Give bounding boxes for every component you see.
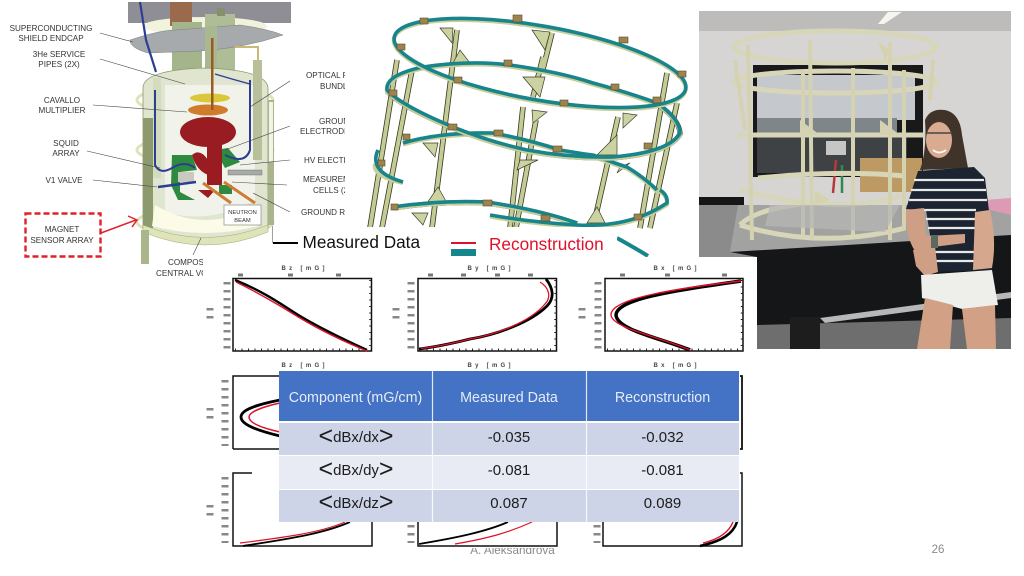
icon: green central columns bbox=[170, 2, 235, 84]
footer: slide number: 26 bbox=[932, 544, 944, 556]
right callout labels: BUNDLE bbox=[320, 82, 353, 91]
icon: yellow and orange discs bbox=[188, 38, 230, 116]
table row: dBx/dx: -0.035 bbox=[488, 429, 530, 446]
gussets bbox=[412, 28, 637, 225]
callout: magnet sensor array: MAGNET bbox=[45, 225, 79, 234]
table header: Component (mG/cm) bbox=[289, 390, 422, 406]
chart: Bx middle row: Bx [mG] bbox=[654, 363, 696, 369]
table row: dBx/dy: -0.081 bbox=[488, 462, 530, 479]
panel: lab photo bbox=[699, 11, 1011, 349]
label: neutron beam: NEUTRON bbox=[228, 210, 257, 216]
table row: dBx/dy: > bbox=[379, 455, 394, 483]
right callout labels: COMPOSITE bbox=[168, 258, 217, 267]
icon: green electrode blocks bbox=[171, 148, 240, 200]
footer: author: A. Aleksandrova bbox=[470, 544, 555, 557]
sensor blocks bbox=[378, 15, 686, 221]
table header: Reconstruction bbox=[615, 390, 710, 406]
chart: Bx top row: Bx [mG] bbox=[654, 266, 696, 272]
table row: dBx/dy: -0.081 bbox=[641, 462, 684, 479]
table row: dBx/dx: dBx/dx bbox=[333, 429, 379, 446]
left callout labels: PIPES (2X) bbox=[38, 60, 80, 69]
chart: Bx middle row bbox=[654, 363, 742, 449]
arrow: neutron beam bbox=[203, 182, 255, 203]
right callout labels: GROUND RINGS bbox=[301, 208, 365, 217]
right callout labels: OPTICAL FIBER bbox=[306, 71, 367, 80]
table row: dBx/dy: < bbox=[318, 455, 333, 483]
table row: dBx/dz: > bbox=[379, 488, 394, 516]
table row: dBx/dy bbox=[279, 455, 739, 489]
table row: dBx/dx: < bbox=[318, 422, 333, 450]
right callout labels: CENTRAL VOLUME bbox=[156, 269, 231, 278]
left callout labels bbox=[10, 24, 92, 185]
callout: magnet sensor array: SENSOR ARRAY bbox=[30, 236, 94, 245]
chart: By top row bbox=[396, 266, 556, 351]
chart: By top row: By [mG] bbox=[468, 266, 510, 272]
right callout labels: GROUND bbox=[319, 117, 355, 126]
chart: By bottom row bbox=[411, 522, 557, 546]
table row: dBx/dx bbox=[279, 422, 739, 455]
chart: By middle row: By [mG] bbox=[468, 363, 510, 369]
photo: woman bbox=[906, 110, 998, 349]
chart: Bx bottom row bbox=[597, 473, 742, 546]
legend bbox=[272, 226, 604, 256]
table row: dBx/dy: dBx/dy bbox=[333, 462, 379, 479]
left callout labels: SQUID bbox=[53, 139, 79, 148]
chart: Bz middle row bbox=[210, 363, 324, 449]
label: neutron beam: BEAM bbox=[234, 218, 251, 224]
leader lines bbox=[87, 33, 290, 255]
legend: reconstruction: Reconstruction bbox=[489, 234, 604, 254]
chart: Bz bottom row bbox=[210, 473, 372, 546]
left callout labels: SHIELD ENDCAP bbox=[18, 34, 84, 43]
right callout labels: HV ELECTRODE bbox=[304, 156, 368, 165]
left callout labels: MULTIPLIER bbox=[38, 106, 86, 115]
left callout labels: CAVALLO bbox=[44, 96, 80, 105]
icon: blue service pipes bbox=[155, 74, 250, 187]
chart: Bz top row: Bz [mG] bbox=[282, 266, 324, 272]
right callout labels: ELECTRODE bbox=[300, 127, 350, 136]
right callout labels: CELLS (2X) bbox=[313, 186, 356, 195]
arrow: magnet sensor pointer bbox=[101, 216, 137, 233]
table row: dBx/dz: 0.087 bbox=[490, 495, 528, 512]
chart: Bz middle row: Bz [mG] bbox=[282, 363, 324, 369]
panel: sensor ring frame CAD model bbox=[345, 0, 697, 262]
panel: cryostat diagram bbox=[10, 2, 368, 278]
table row: dBx/dz: < bbox=[318, 488, 333, 516]
icon: outer ring supports bbox=[137, 86, 273, 236]
callout: magnet sensor array bbox=[26, 214, 100, 256]
table row: dBx/dz bbox=[279, 488, 739, 522]
table row: dBx/dz: dBx/dz bbox=[333, 495, 379, 512]
table row: dBx/dz: 0.089 bbox=[644, 495, 681, 512]
left callout labels: 3He SERVICE bbox=[33, 50, 86, 59]
right callout labels bbox=[156, 71, 368, 278]
window bbox=[753, 65, 923, 193]
icon: shield endcap plate bbox=[130, 25, 283, 53]
legend: reconstruction bbox=[451, 234, 604, 256]
chart: Bx top row bbox=[582, 266, 743, 351]
icon: red electrode bbox=[180, 117, 236, 198]
legend: measured data: Measured Data bbox=[302, 232, 420, 252]
rings bbox=[375, 1, 692, 256]
table header bbox=[279, 371, 739, 421]
table row: dBx/dx: -0.032 bbox=[641, 429, 684, 446]
table header: Measured Data bbox=[460, 390, 558, 406]
chart: Bz top row bbox=[210, 266, 372, 351]
photo background bbox=[699, 11, 1011, 349]
photo: cage frame bbox=[734, 31, 936, 240]
left callout labels: SUPERCONDUCTING bbox=[10, 24, 92, 33]
icon: vessel body bbox=[141, 60, 274, 264]
left callout labels: ARRAY bbox=[52, 149, 80, 158]
struts bbox=[370, 30, 677, 228]
table row: dBx/dx: > bbox=[379, 422, 394, 450]
right callout labels: MEASUREMENT bbox=[303, 175, 366, 184]
left callout labels: V1 VALVE bbox=[45, 176, 83, 185]
table: gradient components bbox=[279, 371, 739, 522]
panel: charts white background bbox=[203, 257, 757, 548]
label: neutron beam bbox=[224, 205, 261, 225]
